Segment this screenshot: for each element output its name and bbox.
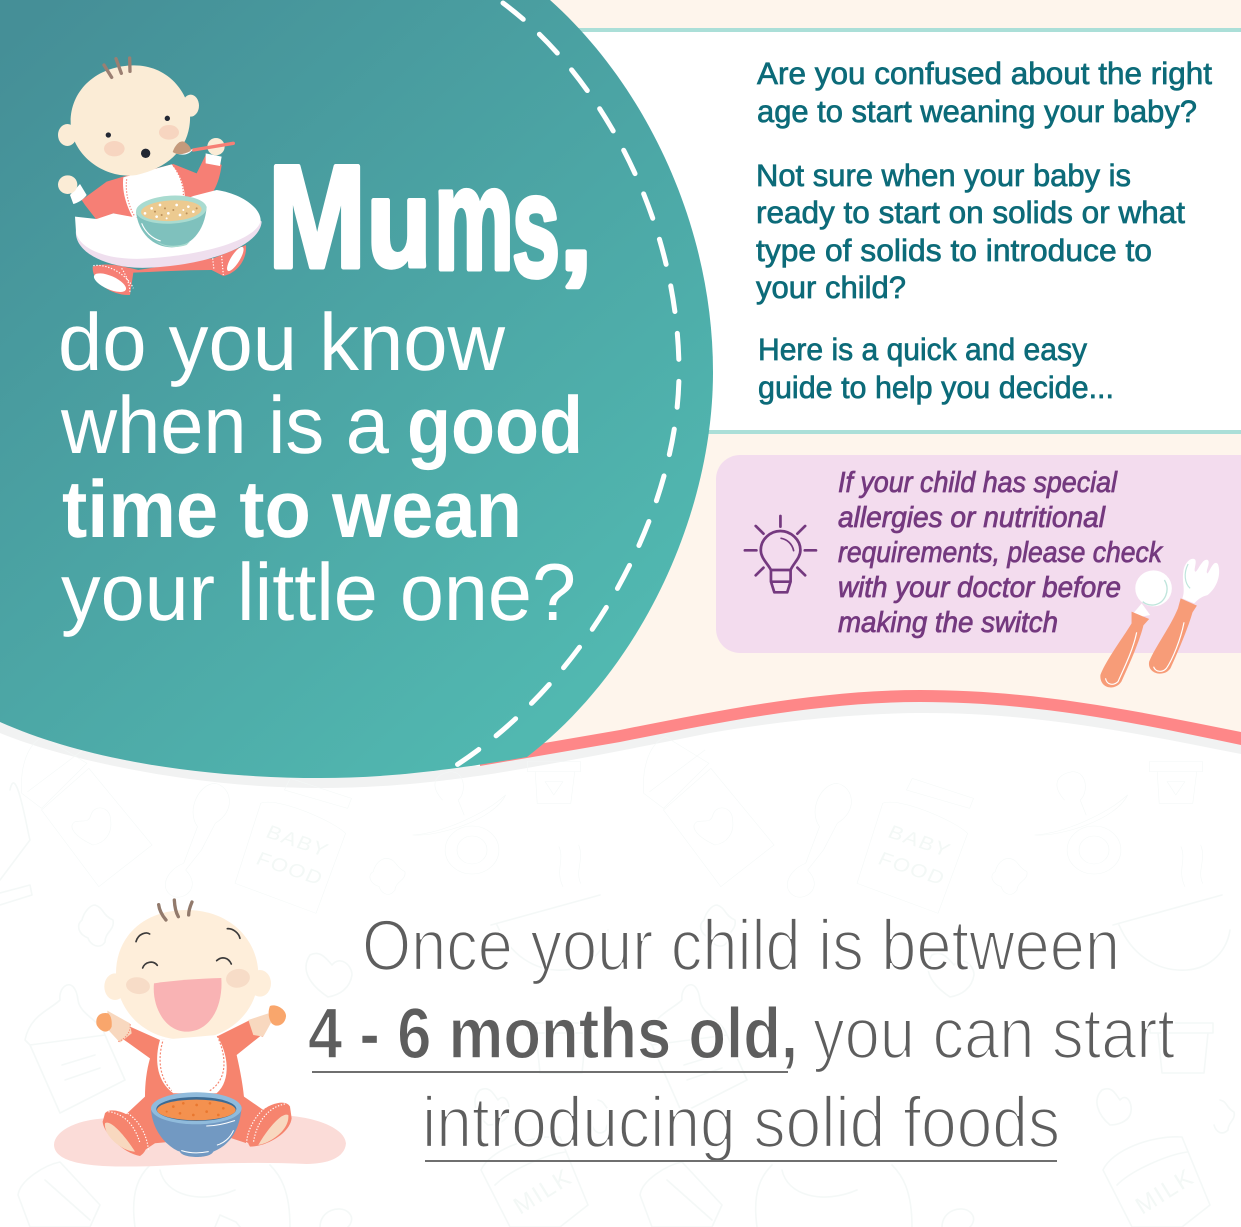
heading: Mums,: , xyxy=(560,166,592,294)
pattern tile right: FOOD xyxy=(875,848,949,889)
baby face xyxy=(104,116,179,158)
illustration: baby eating at high-chair tray xyxy=(58,58,262,296)
top cream strip xyxy=(540,0,1241,32)
baby feet xyxy=(103,1103,292,1156)
guide intro xyxy=(758,332,1114,405)
question: right age: age to start weaning your baby? xyxy=(757,94,1197,129)
dashed circle stitching xyxy=(452,3,679,768)
right hand with spoon xyxy=(172,138,233,166)
heading: Mums,: m xyxy=(434,137,514,300)
allergy advice text: If your child has special xyxy=(838,467,1118,499)
baby legs xyxy=(93,245,246,295)
grey wave shadow xyxy=(0,702,1241,800)
heading: do you know when is a good time to wean your little one?: time to wean xyxy=(62,465,522,555)
pattern tile left: MILK xyxy=(509,1163,577,1220)
question: right age: Are you confused about the right xyxy=(757,56,1212,91)
allergy advice text: allergies or nutritional xyxy=(838,502,1106,534)
pattern tile right xyxy=(640,737,1234,1227)
statement: start solid foods between 4-6 months xyxy=(308,906,1175,1163)
baby spoon xyxy=(1100,570,1172,687)
question: ready for solids: type of solids to introduce to xyxy=(756,233,1152,268)
heading: do you know when is a good time to wean your little one?: do you know xyxy=(58,298,505,388)
baby bib xyxy=(123,164,185,218)
baby head xyxy=(71,65,190,176)
baby fork xyxy=(1149,559,1219,674)
heading: do you know when is a good time to wean your little one? xyxy=(58,298,583,638)
heading: Mums,: M xyxy=(268,135,366,298)
heading: Mums,: u xyxy=(367,155,431,293)
question: ready for solids: your child? xyxy=(756,270,906,305)
background pattern: baby food icons xyxy=(0,737,1234,1227)
teal circle panel xyxy=(0,0,713,778)
pattern tile left xyxy=(0,737,612,1227)
guide intro: guide to help you decide... xyxy=(758,370,1114,405)
icon: baby spoon and fork xyxy=(1100,559,1219,687)
guide intro: Here is a quick and easy xyxy=(758,332,1087,367)
baby head xyxy=(116,910,258,1040)
heading: do you know when is a good time to wean your little one?: your little one? xyxy=(61,548,576,638)
baby bib xyxy=(157,1035,227,1093)
baby ears xyxy=(58,95,199,146)
pink floor mat xyxy=(54,1115,346,1167)
question: ready for solids xyxy=(756,158,1185,305)
heading: do you know when is a good time to wean your little one?: good xyxy=(407,381,583,471)
question: ready for solids: Not sure when your baby is xyxy=(756,158,1131,193)
statement: start solid foods between 4-6 months: introducing solid foods xyxy=(422,1083,1060,1163)
heading: do you know when is a good time to wean your little one?: when is a xyxy=(60,381,390,471)
statement: start solid foods between 4-6 months: you can start xyxy=(813,994,1175,1074)
baby body xyxy=(120,1020,270,1153)
baby body and arms xyxy=(82,155,222,220)
intro questions text xyxy=(756,56,1212,405)
high-chair tray xyxy=(75,190,262,268)
allergy advice text: with your doctor before xyxy=(838,572,1121,604)
baby hair xyxy=(159,900,192,920)
pattern tile left: FOOD xyxy=(253,848,327,889)
illustration: laughing baby with bowl xyxy=(54,900,346,1167)
heading: Mums,: s xyxy=(512,144,560,307)
left hand and cuff xyxy=(58,175,87,204)
pattern tile right: BABY xyxy=(885,821,955,861)
baby hair xyxy=(104,58,130,77)
lentil bowl xyxy=(151,1092,242,1157)
pattern tile right: MILK xyxy=(1131,1163,1199,1220)
lower cream panel xyxy=(500,430,1241,773)
allergy advice text xyxy=(838,467,1163,639)
baby arms xyxy=(96,1005,286,1043)
cereal bowl xyxy=(135,194,207,247)
question: right age xyxy=(757,56,1212,129)
baby face xyxy=(125,929,251,1032)
pattern tile left: BABY xyxy=(263,821,333,861)
allergy advice text: requirements, please check xyxy=(838,537,1163,569)
statement: start solid foods between 4-6 months: Once your child is between xyxy=(362,906,1120,986)
coral wave band xyxy=(480,690,1241,790)
white lower background xyxy=(0,713,1241,1227)
panel: allergy advice xyxy=(716,455,1241,687)
statement: start solid foods between 4-6 months: 4 - 6 months old, xyxy=(308,994,798,1074)
heading: Mums, xyxy=(268,135,592,307)
allergy advice text: making the switch xyxy=(838,607,1058,639)
question: ready for solids: ready to start on solids or what xyxy=(756,195,1185,230)
baby ears xyxy=(104,970,271,1000)
icon: light bulb xyxy=(745,516,816,592)
